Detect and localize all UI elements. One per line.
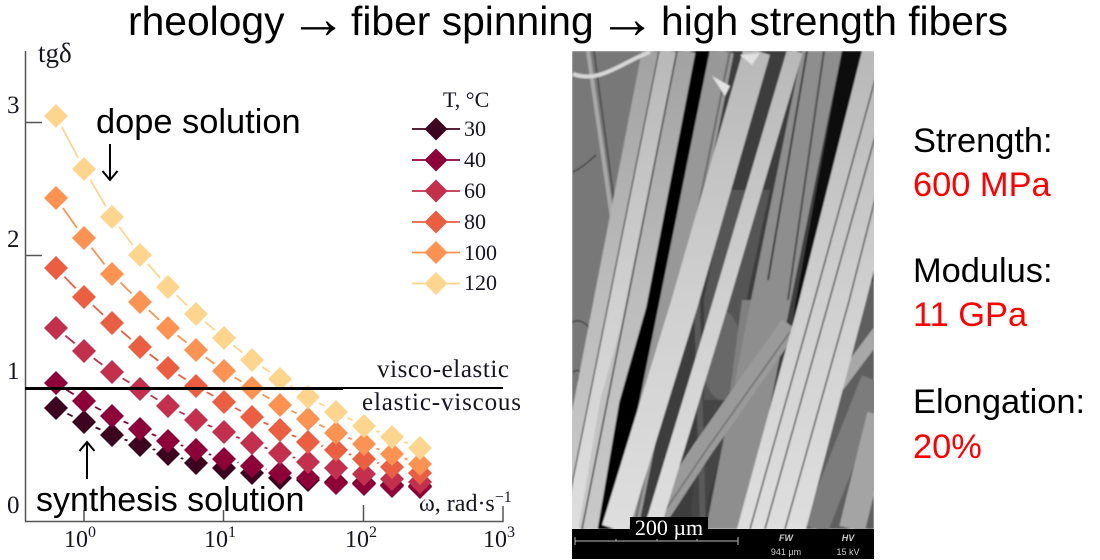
scale bar panel: FW xyxy=(779,533,794,543)
legend: 30 xyxy=(464,116,486,141)
scale bar panel: 15 kV xyxy=(836,547,860,557)
elongation: Elongation: xyxy=(913,383,1085,421)
fiber properties xyxy=(913,122,1085,466)
legend: 40 xyxy=(464,147,486,172)
strength: 600 MPa xyxy=(913,166,1052,204)
arrow: dope solution xyxy=(102,144,118,180)
x axis labels: 2 xyxy=(369,524,377,541)
arrow: synthesis solution xyxy=(80,442,94,479)
scale bar panel: 941 µm xyxy=(771,547,801,557)
strength: Strength: xyxy=(913,122,1053,160)
modulus: 11 GPa xyxy=(913,296,1028,334)
chart axes and ticks xyxy=(25,51,503,522)
label: dope solution: dope solution xyxy=(96,103,301,141)
label: elastic-viscous: elastic-viscous xyxy=(362,389,521,416)
x axis labels: 1 xyxy=(228,524,236,541)
x axis labels: 10 xyxy=(64,527,88,553)
legend: 60 xyxy=(464,178,486,203)
legend: T, °C xyxy=(443,87,489,112)
data series: 30 °C xyxy=(56,408,420,486)
data series: 120 °C xyxy=(56,116,420,448)
y axis title: tgδ xyxy=(38,38,72,68)
x axis title: −1 xyxy=(495,489,512,506)
elongation xyxy=(913,383,1085,466)
x axis labels xyxy=(64,524,515,553)
scale bar panel: HV xyxy=(842,533,855,543)
x axis labels: 10 xyxy=(345,527,369,553)
x axis title: ω, rad·s xyxy=(419,491,495,517)
modulus: Modulus: xyxy=(913,252,1053,290)
elongation: 20% xyxy=(913,428,982,466)
y axis labels xyxy=(7,92,20,519)
label: visco-elastic: visco-elastic xyxy=(377,356,509,383)
y axis labels: 2 xyxy=(7,226,20,253)
boundary line between visco-elastic and elastic-viscous xyxy=(25,387,343,390)
legend: 100 xyxy=(464,240,497,265)
scale bar panel: 200 µm xyxy=(635,515,703,540)
label: synthesis solution: synthesis solution xyxy=(36,481,304,519)
x axis labels: 10 xyxy=(483,527,507,553)
x axis labels: 3 xyxy=(507,524,515,541)
data series: 40 °C xyxy=(56,383,420,487)
legend: 120 xyxy=(464,270,497,295)
y axis labels: 0 xyxy=(7,492,20,519)
x axis labels: 10 xyxy=(204,527,228,553)
chart: tg delta versus angular frequency xyxy=(7,38,521,553)
scale bar panel xyxy=(572,515,874,559)
y axis labels: 1 xyxy=(7,358,20,385)
connecting lines of the series xyxy=(56,116,420,487)
legend xyxy=(412,87,497,295)
data series: 60 °C xyxy=(56,328,420,482)
data series: 80 °C xyxy=(56,268,420,473)
SEM micrograph of fibers xyxy=(572,51,874,559)
strength xyxy=(913,122,1053,204)
legend: 80 xyxy=(464,209,486,234)
x axis labels: 0 xyxy=(88,524,96,541)
y axis labels: 3 xyxy=(7,92,20,119)
data series: 100 °C xyxy=(56,198,420,464)
modulus xyxy=(913,252,1053,334)
micrograph image area xyxy=(572,51,874,529)
